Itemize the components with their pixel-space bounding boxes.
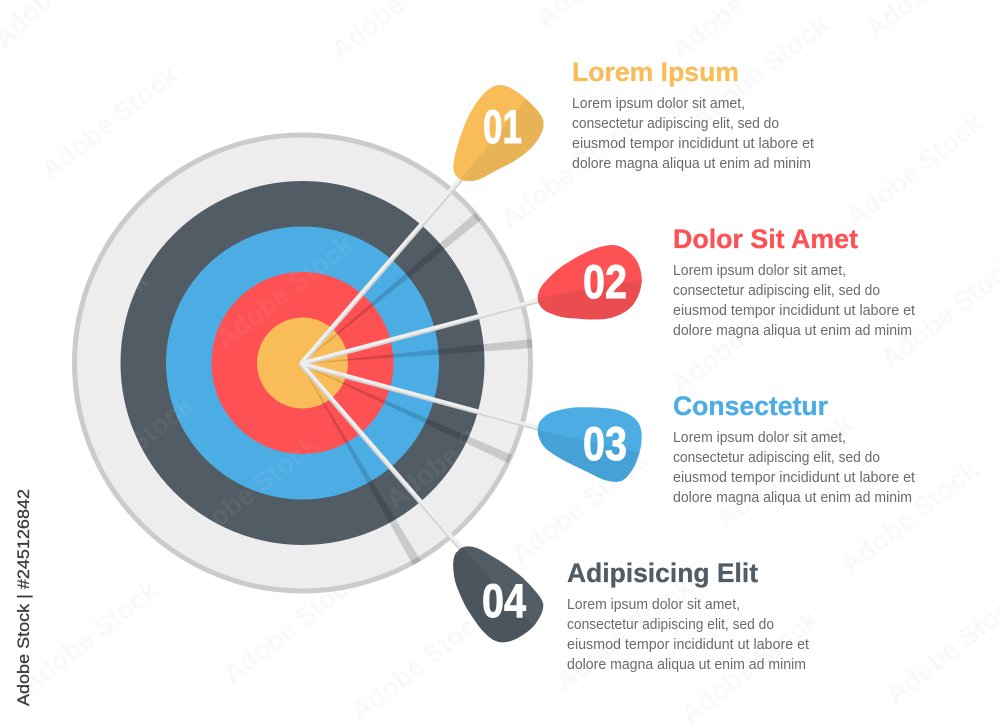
watermark over target	[5, 94, 530, 555]
number: 02	[583, 255, 627, 308]
number: 04	[482, 574, 526, 627]
target board	[74, 135, 530, 591]
watermark: Adobe Stock	[217, 564, 367, 690]
watermark over target: Adobe Stock	[5, 264, 155, 390]
shaft	[301, 363, 464, 551]
body	[567, 596, 810, 673]
number: 01	[483, 100, 522, 153]
watermark: Adobe Stock	[505, 444, 655, 570]
shaft	[301, 363, 541, 429]
stock id side label: Adobe Stock | #245126842	[14, 489, 33, 706]
heading: Dolor Sit Amet	[673, 224, 858, 254]
dart 4	[301, 363, 543, 650]
watermark: Adobe Stock	[675, 604, 825, 727]
watermark: Adobe Stock	[685, 9, 835, 135]
watermark: Adobe Stock	[665, 274, 815, 400]
watermark: Adobe Stock	[840, 107, 990, 233]
text block 4	[567, 558, 810, 673]
watermark over target: Adobe Stock	[210, 229, 360, 355]
blue ring	[166, 226, 439, 500]
dart 1	[300, 85, 560, 364]
number: 03	[583, 417, 627, 470]
outer ring	[74, 135, 530, 591]
flight	[538, 245, 642, 320]
body: consectetur adipiscing elit, sed do	[572, 115, 779, 132]
watermark: Adobe Stock	[345, 601, 495, 727]
watermark over target: Adobe Stock	[175, 429, 325, 555]
flight	[538, 407, 642, 482]
shaft	[300, 176, 463, 364]
red ring	[212, 272, 394, 454]
body	[673, 262, 916, 339]
body: consectetur adipiscing elit, sed do	[673, 282, 880, 299]
body: consectetur adipiscing elit, sed do	[673, 449, 880, 466]
body: dolore magna aliqua ut enim ad minim	[572, 155, 811, 172]
body: eiusmod tempor incididunt ut labore et	[572, 135, 815, 152]
heading: Consectetur	[673, 391, 828, 421]
watermark over target: Adobe Stock	[50, 389, 200, 515]
body	[673, 429, 916, 506]
dart 3	[301, 363, 650, 490]
watermark: Adobe Stock	[835, 454, 985, 580]
body: dolore magna aliqua ut enim ad minim	[673, 322, 912, 339]
body: Lorem ipsum dolor sit amet,	[673, 429, 846, 446]
text block 1	[572, 57, 815, 172]
body: eiusmod tempor incididunt ut labore et	[673, 469, 916, 486]
watermark: Adobe Stock	[495, 109, 645, 235]
body: Lorem ipsum dolor sit amet,	[567, 596, 740, 613]
text block 2	[673, 224, 916, 339]
watermark: Adobe Stock	[15, 574, 165, 700]
body	[572, 95, 815, 172]
watermark over target: Adobe Stock	[380, 389, 530, 515]
flight	[453, 85, 544, 181]
body: eiusmod tempor incididunt ut labore et	[567, 636, 810, 653]
body: Lorem ipsum dolor sit amet,	[673, 262, 846, 279]
dart 2	[301, 245, 650, 364]
infographic	[16, 62, 915, 706]
body: consectetur adipiscing elit, sed do	[567, 616, 774, 633]
dart shadows	[301, 213, 533, 565]
flight	[453, 546, 543, 642]
dark ring	[120, 181, 484, 545]
watermark: Adobe Stock	[35, 59, 185, 185]
body: eiusmod tempor incididunt ut labore et	[673, 302, 916, 319]
body: dolore magna aliqua ut enim ad minim	[673, 489, 912, 506]
heading: Lorem Ipsum	[572, 57, 739, 87]
shaft	[301, 299, 541, 364]
heading: Adipisicing Elit	[567, 558, 758, 588]
watermark: Adobe Stock	[710, 409, 860, 535]
body: Lorem ipsum dolor sit amet,	[572, 95, 745, 112]
body: dolore magna aliqua ut enim ad minim	[567, 656, 806, 673]
bullseye	[257, 318, 348, 408]
watermark: Adobe Stock	[550, 571, 700, 697]
watermark over target: Adobe Stock	[165, 94, 315, 220]
text block 3	[673, 391, 916, 506]
